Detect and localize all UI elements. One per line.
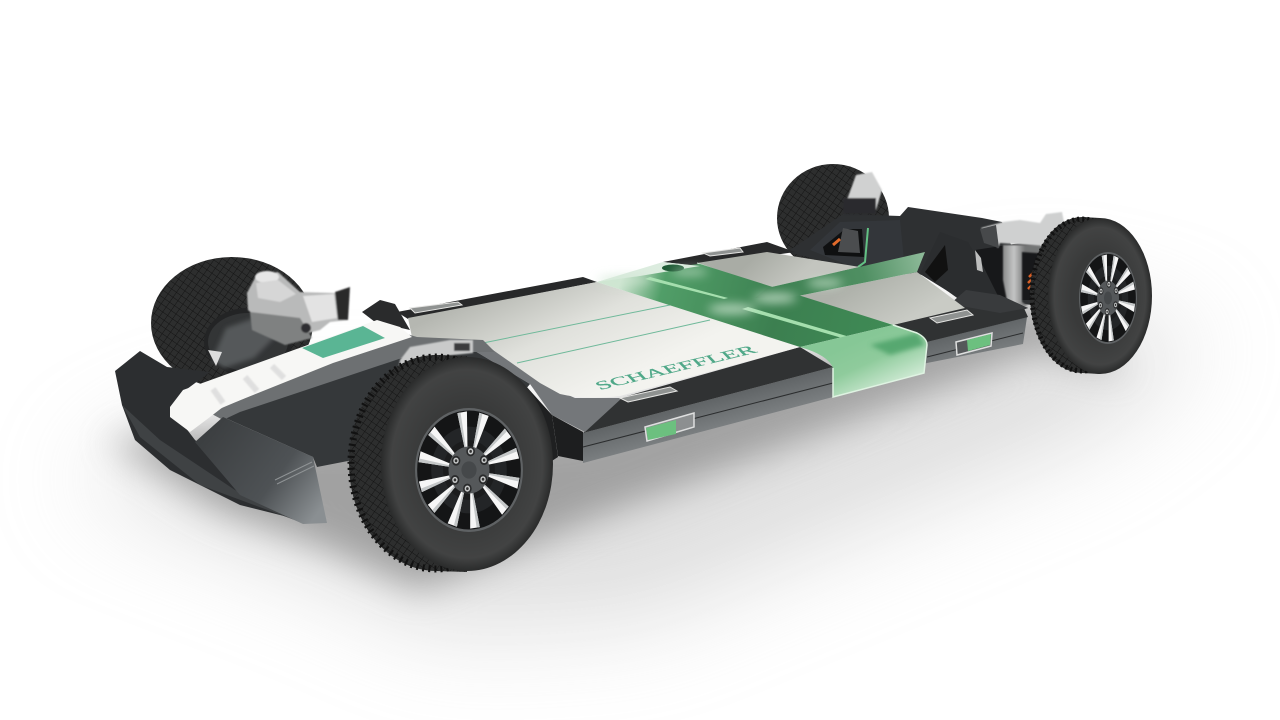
tyre tread [349, 355, 523, 572]
alloy rim [1079, 252, 1137, 344]
rear chassis structure [787, 172, 1035, 318]
tyre sidewall [381, 357, 553, 571]
green accent lines [858, 228, 941, 275]
rear suspension and motor [975, 212, 1066, 306]
tyre sidewall [1048, 218, 1152, 374]
teal panel [302, 326, 385, 358]
tyre tread [1030, 217, 1134, 374]
orange detail [833, 239, 840, 245]
front bumper [115, 351, 327, 524]
far front wheel [151, 257, 313, 389]
near front wheel [349, 355, 553, 572]
white nose panel [170, 320, 412, 432]
ground shadow [70, 300, 1210, 630]
battery pack top rim [397, 242, 1028, 461]
far rear strut [843, 172, 882, 214]
far rear wheel [777, 164, 889, 272]
cooling lines on deck [483, 305, 710, 363]
far front brake hub [208, 313, 288, 371]
alloy rim [415, 408, 523, 532]
near rear wheel [1030, 217, 1152, 374]
green band wrapping the side wall [800, 325, 927, 397]
rear tower [920, 232, 1028, 318]
dark body behind near front wheel [515, 385, 558, 475]
battery deck: front silver panel [408, 282, 800, 398]
brand text: SCHAEFFLER [592, 344, 761, 393]
battery deck: rear panels [697, 252, 965, 325]
front subframe [210, 300, 530, 467]
deck vents [410, 248, 973, 402]
far front strut and motor [247, 271, 350, 345]
band highlights [597, 269, 843, 314]
near front strut [397, 340, 473, 377]
battery pack side wall [583, 317, 1027, 463]
green cooling band [597, 252, 925, 347]
bumper wing [195, 417, 327, 524]
side handles [645, 333, 992, 441]
